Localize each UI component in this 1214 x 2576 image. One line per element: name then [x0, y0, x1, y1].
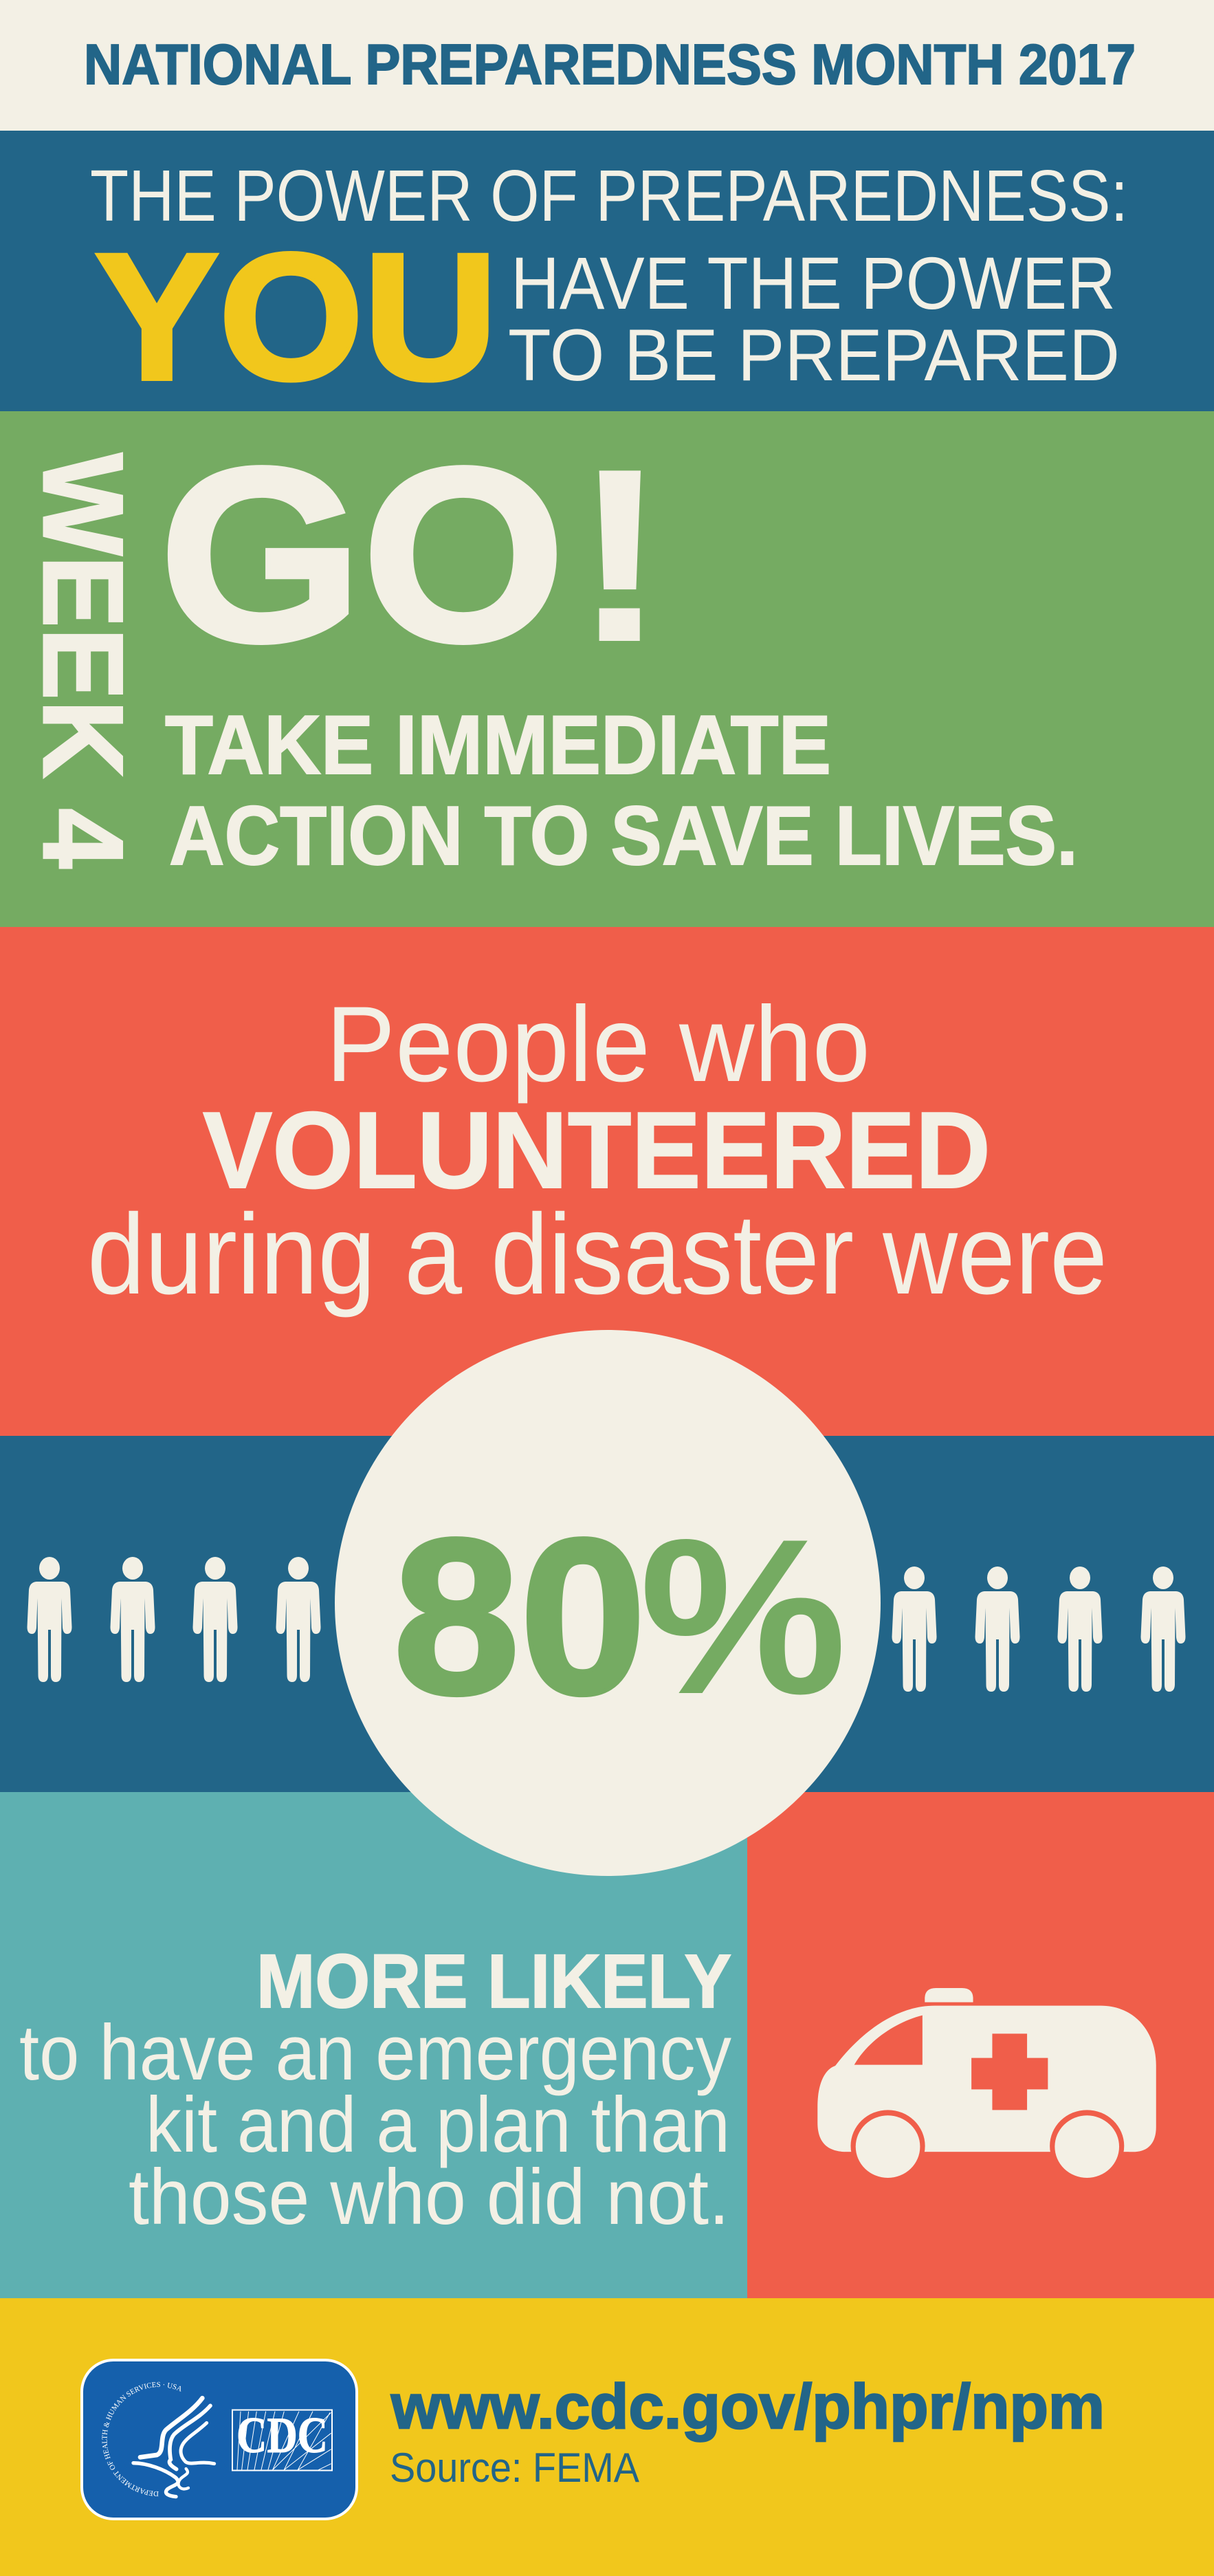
icons: right group of people: [892, 1567, 1185, 1692]
text: people who: People who: [326, 985, 870, 1104]
callout: 80 percent circle: [335, 1330, 881, 1876]
text: those who did not: those who did not.: [129, 2154, 729, 2241]
panel: people band: [0, 1436, 1214, 1792]
panel: campaign title: [0, 131, 1214, 417]
seal text: department of health and human services: DEPARTMENT OF HEALTH & HUMAN SERVICES · USA: [102, 2382, 181, 2496]
heading: go: GO: [159, 417, 565, 693]
text: source: Source: FEMA: [390, 2445, 639, 2491]
text: volunteered: VOLUNTEERED: [203, 1090, 991, 1211]
icon: ambulance: [817, 1988, 1156, 2182]
text: website url: www.cdc.gov/phpr/npm: [390, 2372, 1105, 2442]
title line: to be prepared: TO BE PREPARED: [508, 314, 1120, 396]
title word: you: YOU: [95, 216, 498, 417]
heading: exclamation mark: !: [572, 417, 668, 694]
icon: HHS eagle: [133, 2398, 214, 2497]
logo: CDC box: [232, 2408, 332, 2470]
panel: people who volunteered: [0, 927, 1214, 1436]
logo: HHS and CDC: [80, 2359, 358, 2520]
text: kit and a plan than: kit and a plan than: [146, 2082, 730, 2169]
text: during a disaster were: during a disaster were: [87, 1191, 1107, 1318]
panel: footer: [0, 2298, 1214, 2576]
symbol: percent: %: [639, 1494, 847, 1740]
text: take immediate: TAKE IMMEDIATE: [165, 698, 831, 792]
text: to have an emergency: to have an emergency: [19, 2009, 731, 2097]
icons: left group of people: [27, 1557, 320, 1682]
panel: ambulance: [747, 1792, 1214, 2298]
title line: have the power: HAVE THE POWER: [511, 241, 1116, 325]
rotated label: week 4: WEEK 4: [20, 453, 146, 869]
text: more likely: MORE LIKELY: [256, 1939, 731, 2024]
heading: national preparedness month: NATIONAL PREPAREDNESS MONTH 2017: [84, 32, 1136, 96]
text: CDC: CDC: [236, 2408, 328, 2464]
panel: header: [0, 0, 1214, 131]
text: action to save lives: ACTION TO SAVE LIVES.: [169, 789, 1078, 882]
panel: more likely text: [0, 1792, 747, 2298]
number: 80: 80: [393, 1494, 646, 1740]
panel: week 4 go: [0, 411, 1214, 927]
